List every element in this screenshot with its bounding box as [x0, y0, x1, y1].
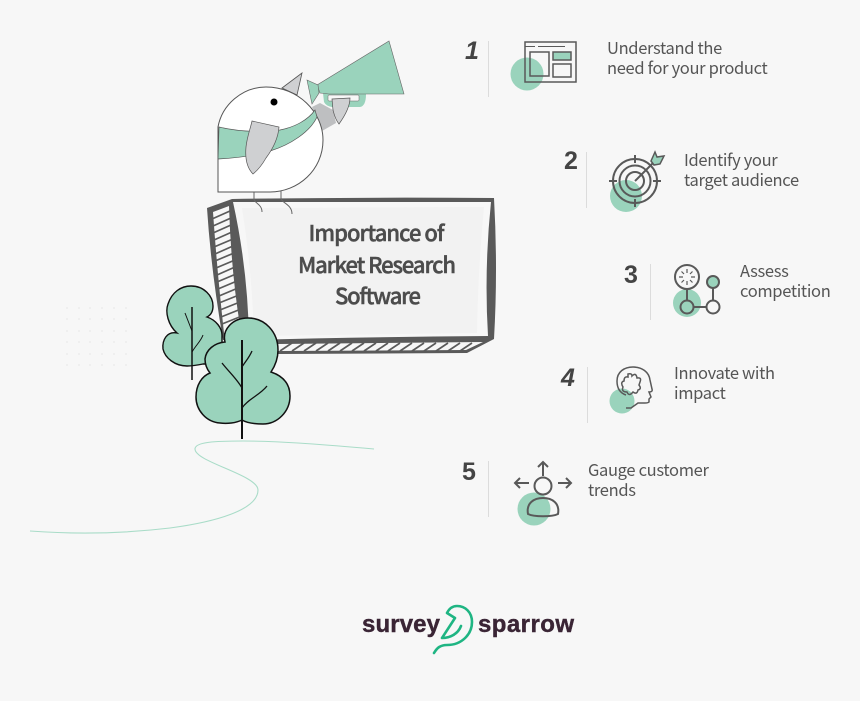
bird crest: [282, 73, 302, 95]
icon: browser layout: [510, 42, 576, 90]
sign left side hatching: [212, 206, 242, 333]
label 1: Understand the: [607, 35, 722, 59]
label 5: [588, 457, 709, 501]
logo: surveysparrow: [362, 606, 574, 653]
step 2: [564, 147, 799, 212]
sign front face: [233, 202, 491, 340]
megaphone: [307, 41, 404, 107]
step 5: [462, 457, 709, 526]
number 5: 5: [462, 458, 476, 486]
bird: [218, 41, 404, 214]
bird wing: [246, 121, 279, 174]
sign bottom hatching: [278, 342, 483, 351]
bird hand: [332, 98, 350, 124]
label 1: need for your product: [607, 55, 768, 79]
large tree: [196, 318, 290, 439]
label 2: Identify your: [684, 147, 778, 171]
winding path line: [30, 441, 374, 533]
bird legs: [254, 184, 292, 214]
bird body: [218, 87, 323, 192]
sign board: [207, 198, 496, 354]
label 3: [740, 258, 830, 302]
step 4: [560, 360, 775, 423]
label 4: Innovate with: [674, 360, 775, 384]
sign body dark silhouette: [207, 198, 496, 354]
label 5: Gauge customer: [588, 457, 709, 481]
label 1: [607, 35, 768, 79]
label 3: competition: [740, 278, 830, 302]
sign title: Market Research: [298, 248, 456, 280]
sign title: Importance of: [308, 216, 446, 248]
sign title: Software: [335, 279, 421, 311]
icon: competition nodes: [673, 265, 720, 317]
sign title: [298, 216, 456, 311]
sign inner panel: [242, 207, 484, 336]
step 1: [465, 35, 768, 97]
label 5: trends: [588, 477, 636, 501]
logo word survey: survey: [362, 611, 441, 638]
label 3: Assess: [740, 258, 789, 282]
icon: head with puzzle: [610, 367, 652, 414]
bird arm: [312, 103, 336, 131]
logo word sparrow: sparrow: [478, 611, 574, 638]
label 2: target audience: [684, 167, 799, 191]
logo bird mark: [434, 606, 472, 653]
number 4: 4: [560, 364, 575, 392]
step 3: [624, 258, 830, 320]
number 3: 3: [624, 261, 638, 289]
label 2: [684, 147, 799, 191]
icon: person with arrows: [515, 462, 571, 526]
bird eye: [270, 98, 278, 106]
number 1: 1: [465, 37, 479, 65]
number 2: 2: [564, 147, 578, 175]
bird scarf: [218, 110, 317, 159]
small tree: [163, 286, 222, 380]
icon: target: [609, 152, 664, 212]
dot grid decoration: [66, 307, 127, 366]
label 4: [674, 360, 775, 404]
label 4: impact: [674, 380, 726, 404]
